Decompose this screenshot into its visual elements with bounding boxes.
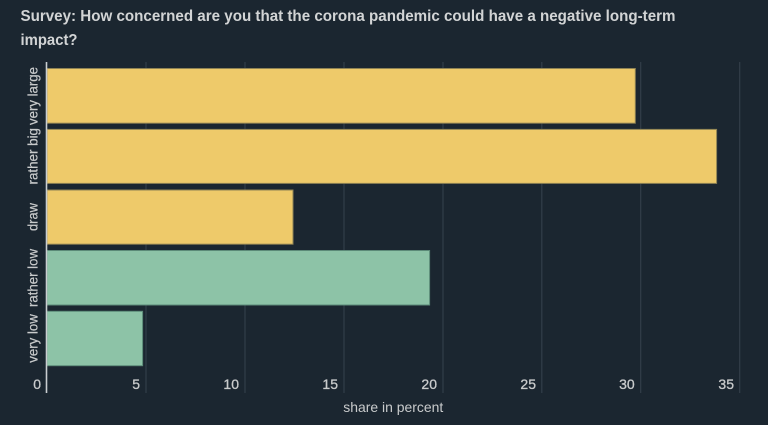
x axis tick labels: 10 (223, 376, 239, 392)
x axis tick labels: 5 (132, 376, 140, 392)
y axis line (46, 62, 48, 393)
bar: rather big (47, 129, 717, 183)
x axis tick labels: 35 (718, 376, 734, 392)
y axis category labels: rather big (24, 128, 40, 184)
x axis title: share in percent (343, 399, 443, 415)
x axis tick labels: 30 (619, 376, 635, 392)
y axis category labels (24, 67, 40, 363)
title: Survey: How concerned are you that the corona pandemic could have a negative long-term (20, 8, 676, 25)
bar: very large (47, 68, 635, 123)
y axis category labels: very large (24, 67, 40, 125)
title: impact? (20, 32, 78, 49)
x axis tick labels: 0 (33, 376, 41, 392)
title (20, 8, 676, 49)
bar: rather low (47, 250, 430, 305)
y axis category labels: draw (24, 202, 40, 231)
x axis tick labels: 20 (421, 376, 437, 392)
x axis tick labels: 15 (322, 376, 338, 392)
bar: very low (47, 311, 143, 366)
y axis category labels: very low (24, 313, 40, 363)
bar: draw (47, 190, 293, 244)
y axis category labels: rather low (24, 248, 40, 307)
x axis tick labels (33, 376, 734, 392)
bars (47, 68, 717, 366)
x axis tick labels: 25 (520, 376, 536, 392)
